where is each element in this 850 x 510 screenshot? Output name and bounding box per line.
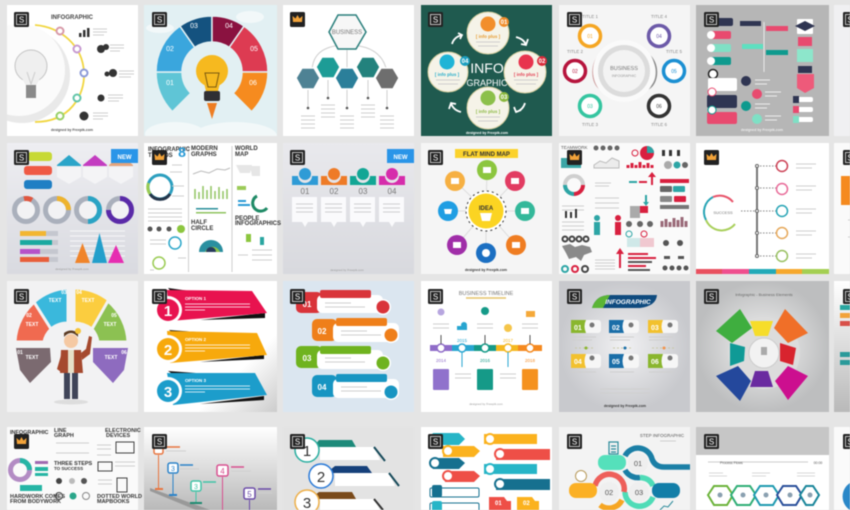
- number tags: 01: [501, 20, 508, 26]
- segment labels: 02: [26, 313, 32, 319]
- red banner: OPTION 1: [185, 296, 207, 301]
- new badge: NEW: [394, 155, 408, 161]
- bottom icons: [662, 240, 688, 270]
- segment labels: TEXT: [104, 322, 116, 328]
- success ring: SUCCESS: [713, 210, 733, 215]
- bottom folders: 02: [523, 501, 530, 507]
- step 4: 04: [318, 383, 327, 392]
- horizontal bars: [628, 253, 656, 271]
- step numbers: 02: [330, 187, 339, 196]
- number tags: 04: [462, 59, 469, 65]
- middle divider dots: [575, 347, 674, 349]
- node titles: TITLE 1: [582, 14, 598, 19]
- hexagon icons: [718, 492, 812, 498]
- segment numbers: 03: [190, 23, 198, 30]
- circle captions: [ info plus ]: [435, 72, 460, 77]
- step 3: 03: [303, 354, 312, 363]
- tile: business timeline: [421, 281, 552, 412]
- red banner: [154, 290, 267, 324]
- title: STEP INFOGRAPHIC: [640, 433, 685, 438]
- sheet headings: MODERN: [191, 146, 218, 152]
- road: [150, 488, 210, 510]
- circle captions: [ info plus ]: [476, 109, 501, 114]
- segment labels: TEXT: [105, 355, 117, 361]
- progress bars: [196, 208, 226, 214]
- node titles: TITLE 2: [567, 49, 583, 54]
- tile: infographic six cards: [559, 281, 690, 412]
- list rows: [148, 165, 186, 270]
- node glyphs: [444, 167, 529, 257]
- dots row: [148, 225, 185, 233]
- step numbers: [301, 187, 397, 196]
- node numbers: 02: [572, 69, 578, 75]
- segment labels: 06: [121, 350, 127, 356]
- node numbers: 04: [656, 34, 662, 40]
- horizontal bars: [20, 231, 58, 262]
- tile: teamwork dense dashboard: [559, 143, 690, 274]
- segment labels: 01: [17, 350, 23, 356]
- tile: elements set with donuts and triangles: designed by Freepik.com: [55, 267, 89, 271]
- red pie: [632, 146, 654, 160]
- sheet headings: FROM BODYWORK: [10, 499, 61, 505]
- tile: cropped right edge row 3: [834, 281, 850, 412]
- small rings: [153, 237, 181, 269]
- left cards: [707, 78, 737, 124]
- tile: flat mind map: designed by Freepik.com: [465, 268, 507, 272]
- segment labels: 03: [61, 290, 67, 296]
- tile: four stepped cards on blue: [283, 281, 414, 412]
- captions: [301, 105, 394, 128]
- tile: cropped right edge row 1: [834, 5, 850, 136]
- tile: road pins: [144, 427, 277, 510]
- center title: [466, 60, 508, 88]
- tile: hexagon chain: Process Flows: [720, 461, 743, 465]
- cards: [292, 197, 404, 227]
- node titles: TITLE 3: [582, 122, 598, 127]
- bar nodes: [437, 344, 534, 352]
- badge: S: [19, 154, 24, 162]
- left tags: [433, 433, 480, 482]
- badge: S: [19, 16, 24, 24]
- card numbers: 02: [612, 325, 620, 332]
- circle icons: [299, 168, 398, 180]
- sheet headings: GRAPHS: [191, 152, 217, 158]
- sheet headings: CIRCLE: [191, 226, 213, 232]
- bottom folders: 01: [495, 501, 502, 507]
- arrows: [449, 33, 528, 112]
- tile: infographic trends sheet: 8: [178, 144, 186, 160]
- hexagon row: [296, 57, 399, 89]
- teal blocks: [20, 461, 48, 491]
- blue banner: 3: [164, 384, 172, 401]
- wheel ring: [728, 317, 800, 389]
- segment labels: 04: [76, 290, 82, 296]
- tile: cropped right edge row 4: [834, 427, 850, 510]
- pin 2: [154, 445, 163, 489]
- left ribbons: [707, 18, 733, 78]
- mind map banner: FLAT MIND MAP: [463, 152, 510, 158]
- bottom folders: [489, 497, 539, 510]
- left donut: [565, 176, 583, 194]
- tile: business hexagons: [283, 5, 414, 136]
- world map: [236, 165, 260, 176]
- step glyphs: [56, 478, 90, 500]
- ribbon 1: 1: [303, 443, 311, 460]
- node numbers: 01: [587, 34, 593, 40]
- number tags: 03: [501, 95, 508, 101]
- tile: chalkboard infographic: designed by Freepik.com: [466, 131, 508, 135]
- triangle chart: [70, 231, 125, 263]
- person icons with bars: [626, 221, 654, 247]
- yellow banner: OPTION 2: [185, 337, 207, 342]
- top hexagon: BUSINESS: [332, 30, 362, 36]
- infographic banner: INFOGRAPHIC: [605, 299, 651, 306]
- segment numbers: 02: [166, 46, 174, 53]
- tile: elements set with donuts and triangles: [7, 143, 138, 274]
- flow ribbons: [595, 448, 690, 508]
- node numbers: 06: [656, 104, 662, 110]
- right banner circles: [485, 434, 505, 489]
- segment labels: 05: [111, 313, 117, 319]
- gray donut row: [664, 161, 688, 169]
- tile: colorful tag banners: [421, 427, 552, 510]
- years: 2018: [525, 358, 536, 363]
- ring graph: [148, 175, 172, 199]
- badge: S: [572, 16, 577, 24]
- option bars: [24, 152, 52, 189]
- sheet headings: ELECTRONIC: [105, 428, 141, 434]
- badge: S: [157, 438, 162, 446]
- segment numbers: 01: [166, 80, 174, 87]
- tile: businessman semicircle: [7, 281, 138, 412]
- circle captions: [ info plus ]: [514, 72, 539, 77]
- node titles: TITLE 6: [651, 122, 667, 127]
- segment labels: TEXT: [26, 322, 38, 328]
- sheet headings: GRAPH: [54, 433, 74, 439]
- card icons: [590, 322, 672, 360]
- donut: [10, 460, 30, 480]
- ring nodes: [564, 26, 684, 116]
- tile: chalkboard infographic: [421, 5, 552, 136]
- line chart: [193, 168, 230, 174]
- sheet headings: HALF: [191, 220, 207, 226]
- card numbers: 05: [612, 359, 620, 366]
- segment numbers: [166, 23, 258, 87]
- sheet headings: INFOGRAPHIC: [10, 430, 49, 436]
- tile: ribbon elements on grey: designed by Freepik.com: [741, 128, 783, 132]
- connector dots: [308, 80, 387, 108]
- sheet headings: MAPBOOKS: [97, 499, 130, 505]
- tile: infographic trends sheet: [144, 143, 281, 274]
- timeline icons: [79, 28, 117, 120]
- step 1: 01: [303, 300, 312, 309]
- number tags: 02: [539, 59, 546, 65]
- tile: four pin cards: designed by Freepik.com: [330, 268, 364, 272]
- years: 2016: [480, 358, 491, 363]
- sheet headings: TRENDS: [148, 153, 173, 159]
- card tags: [571, 320, 663, 368]
- tile: hexagon chain: [696, 427, 829, 510]
- rings row: [562, 236, 588, 272]
- sheet headings: WORLD: [235, 146, 258, 152]
- color strip: [696, 269, 829, 274]
- tile: infographic six cards: designed by Freepik.com: [604, 404, 646, 408]
- step numbers: 04: [388, 187, 397, 196]
- tile: three option banners: [144, 281, 277, 412]
- sheet headings: DOTTED WORLD: [97, 494, 142, 500]
- colored bar: [430, 345, 542, 351]
- badge: [14, 12, 29, 27]
- sheet headings: [10, 428, 142, 505]
- half circle chart: [199, 240, 223, 252]
- tile: cropped right edge row 2: [834, 143, 850, 274]
- pin 5: 5: [247, 490, 252, 499]
- circle captions: [435, 34, 539, 114]
- sheet headings: HARDWORK COMES: [10, 494, 65, 500]
- badge: [704, 150, 719, 165]
- badge: S: [572, 438, 577, 446]
- world map: [562, 244, 592, 261]
- badge: S: [433, 292, 438, 302]
- captions: [796, 164, 816, 258]
- tile: lightbulb timeline infographic: designed by Freepik.com: [51, 128, 93, 132]
- hexagon chain: [708, 486, 819, 505]
- years: 2014: [436, 358, 447, 363]
- tile: numbered ribbons: [283, 427, 414, 510]
- right banners: [484, 434, 550, 490]
- center hub: BUSINESS: [610, 66, 638, 72]
- middle column charts: [629, 172, 656, 218]
- numbered discs: 03: [635, 488, 643, 497]
- top captions: [709, 473, 815, 476]
- years: 2015: [457, 338, 468, 343]
- connectors: [593, 53, 602, 90]
- timeline nodes: [56, 28, 88, 120]
- segment labels: [17, 290, 127, 361]
- segment numbers: 05: [250, 46, 258, 53]
- timeline arc: [35, 25, 84, 122]
- tile: rocket bulb semicircle: [144, 5, 277, 150]
- segment labels: TEXT: [49, 298, 61, 304]
- line chart: [594, 158, 619, 168]
- pin 4: 4: [220, 467, 225, 476]
- badge: [14, 434, 29, 449]
- segment labels: TEXT: [82, 298, 94, 304]
- badge: S: [433, 16, 438, 24]
- yellow banner: 2: [164, 342, 172, 359]
- tile: four pin cards: [283, 143, 414, 274]
- number tags: [460, 17, 547, 102]
- tile: lightbulb timeline infographic: [0, 5, 138, 136]
- badge: S: [572, 292, 577, 302]
- blue banner: [154, 373, 267, 405]
- tile: business infographic hub: [559, 5, 690, 136]
- node numbers: 05: [671, 69, 677, 75]
- center hub: [593, 40, 655, 102]
- devices: [98, 442, 134, 492]
- pin 3b: 3: [194, 484, 198, 491]
- numbered discs: 01: [634, 459, 642, 468]
- ribbon 2: 2: [317, 469, 325, 486]
- new badge: NEW: [118, 155, 132, 161]
- segment numbers: 04: [225, 23, 233, 30]
- badge: [152, 12, 167, 27]
- timeline captions: [93, 29, 134, 119]
- tile: step infographic: [559, 427, 690, 510]
- framed cards: [430, 488, 479, 510]
- stems: [441, 335, 530, 344]
- badge: S: [19, 292, 24, 302]
- red arrow chart: [595, 248, 624, 269]
- bottom cards: [433, 369, 538, 390]
- small chips: [793, 96, 813, 123]
- four circles: [428, 12, 546, 129]
- people: [662, 150, 680, 156]
- badge: [567, 150, 582, 165]
- pills: [569, 455, 680, 498]
- badge: S: [709, 16, 714, 24]
- cartoon man: [54, 328, 92, 404]
- badge: S: [433, 154, 438, 162]
- gray circles row: [594, 146, 620, 150]
- years: [436, 338, 536, 363]
- node titles: TITLE 5: [666, 49, 682, 54]
- sheet headings: THREE STEPS: [54, 461, 93, 467]
- sheet headings: INFOGRAPHIC: [148, 147, 191, 153]
- top labels: [57, 155, 133, 166]
- tile: eight segment wheel: [696, 281, 829, 412]
- sheet headings: TO SUCCESS: [54, 466, 83, 471]
- card numbers: 06: [651, 359, 659, 366]
- badge: [152, 150, 167, 165]
- center hub: INFOGRAPHIC: [612, 74, 637, 78]
- tile: success timeline: [696, 143, 829, 274]
- segments: [15, 288, 128, 342]
- badge: S: [157, 292, 162, 302]
- tile: flat mind map: [421, 143, 552, 274]
- green bars: [195, 186, 227, 199]
- dashboard heading: TEAMWORK: [561, 145, 588, 150]
- sheet headings: DEVICES: [106, 433, 130, 439]
- right column blocks: [660, 179, 689, 209]
- tile: business timeline: designed by Freepik.com: [469, 402, 503, 406]
- right column bar chart: [662, 217, 686, 227]
- card numbers: 01: [574, 325, 582, 332]
- list items: [562, 183, 619, 230]
- card numbers: [574, 325, 659, 366]
- chart icon: [660, 501, 673, 510]
- badge: S: [157, 16, 162, 24]
- center title: GRAPHIC: [466, 78, 508, 88]
- clock icon: [576, 470, 586, 482]
- red banner: 1: [164, 303, 172, 320]
- sheet headings: [148, 146, 281, 232]
- shadows: [168, 288, 265, 404]
- semicircle segments: [156, 16, 268, 112]
- sheet headings: LINE: [54, 428, 67, 434]
- icon: rocket bulb: [196, 55, 228, 119]
- sheet headings: PEOPLE: [235, 216, 259, 222]
- right tags: [795, 19, 815, 93]
- pin captions: [166, 447, 271, 489]
- donut world map: [237, 186, 267, 211]
- badge: S: [709, 438, 714, 446]
- middle ribbons: [740, 21, 788, 72]
- numbered discs: 02: [605, 488, 613, 497]
- badge: S: [295, 154, 300, 162]
- center title: INFO: [470, 60, 504, 76]
- tile: hexagon chain: 00:00: [814, 461, 822, 465]
- blue banner: OPTION 3: [185, 378, 207, 383]
- wheel segments: [716, 309, 808, 401]
- spokes: [448, 170, 525, 253]
- sheet headings: INFOGRAPHICS: [235, 221, 281, 227]
- card numbers: 04: [574, 359, 582, 366]
- top icons: [438, 307, 535, 332]
- badge: S: [295, 292, 300, 302]
- step numbers: 03: [359, 187, 368, 196]
- red bars: [628, 162, 652, 168]
- title row: [708, 461, 808, 463]
- wheel center: [749, 338, 779, 368]
- left tag circles: [430, 434, 453, 481]
- clipboard icon: [609, 442, 618, 454]
- node titles: TITLE 4: [651, 14, 667, 19]
- step numbers: 01: [301, 187, 310, 196]
- circle icons: [440, 16, 534, 106]
- years: 2017: [503, 338, 514, 343]
- wheel title: Infographic - Business Elements: [735, 292, 793, 297]
- step 2: 02: [318, 327, 327, 336]
- step circles: [741, 76, 762, 124]
- badge: [290, 12, 305, 27]
- teal block: [561, 158, 581, 168]
- circle captions: [ info plus ]: [476, 34, 501, 39]
- teal figures: [594, 215, 621, 235]
- donut charts: [14, 198, 132, 222]
- node numbers: 03: [587, 104, 593, 110]
- node titles: [567, 14, 682, 127]
- badge: S: [295, 438, 300, 446]
- yellow banner: [154, 331, 267, 363]
- badge: S: [709, 292, 714, 302]
- icon: light bulb: [15, 50, 47, 98]
- vertical axis: [741, 164, 776, 258]
- numbered discs: [599, 453, 649, 502]
- card numbers: 03: [651, 325, 659, 332]
- idea nodes: [438, 160, 535, 263]
- idea hub: IDEA: [479, 206, 494, 212]
- colored headers: [292, 176, 405, 185]
- timeline title: BUSINESS TIMELINE: [459, 291, 514, 297]
- segment numbers: 06: [249, 80, 257, 87]
- sheet headings: MAP: [235, 152, 248, 158]
- people graphic: [238, 234, 272, 260]
- node numbers: [572, 34, 677, 110]
- heading: infographic: INFOGRAPHIC: [51, 15, 94, 21]
- badge: S: [433, 438, 438, 446]
- pin 3: 3: [171, 466, 175, 473]
- timeline circles: [776, 160, 788, 262]
- cards: [571, 320, 678, 368]
- tile: ribbon elements on grey: [696, 5, 829, 136]
- segment labels: TEXT: [26, 355, 38, 361]
- tile: infographic sheet with devices: [7, 427, 142, 510]
